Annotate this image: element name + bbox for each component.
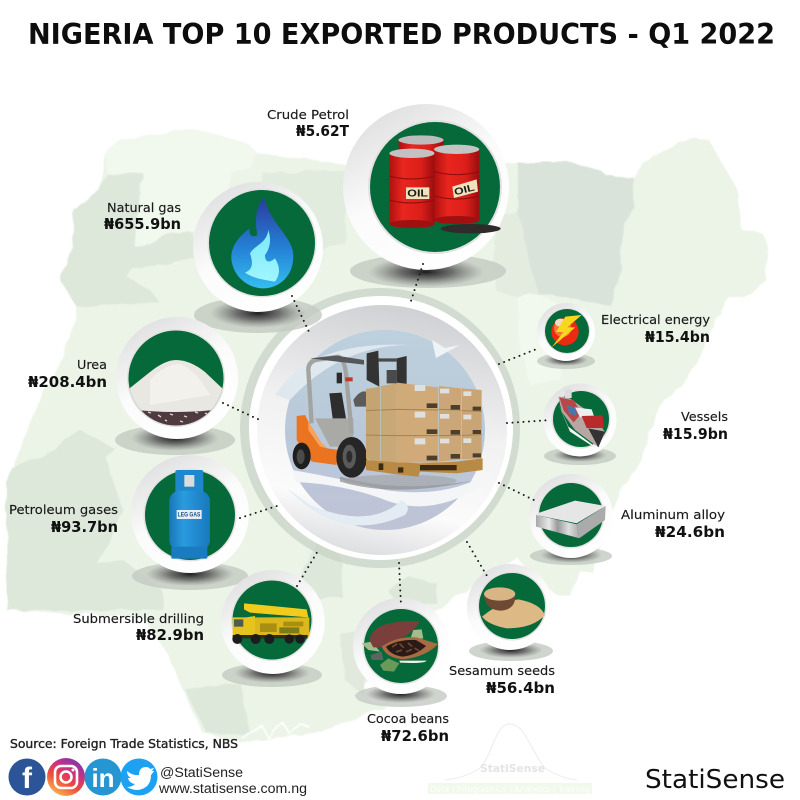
label: Aluminum alloy bbox=[621, 507, 726, 522]
label: Cocoa beans bbox=[367, 711, 449, 726]
label: ₦655.9bn bbox=[104, 215, 181, 233]
social handle and website bbox=[158, 765, 307, 796]
label: Submersible drilling bbox=[73, 611, 204, 626]
icon: linkedin: in bbox=[91, 763, 115, 793]
item: urea bbox=[28, 317, 238, 455]
label: Electrical energy bbox=[601, 312, 711, 327]
icon: aluminum sheet bbox=[536, 501, 606, 538]
icon: urea pile bbox=[130, 360, 222, 426]
icon: container ship bbox=[557, 389, 605, 449]
icon: linkedin bbox=[84, 758, 122, 796]
social icons bbox=[8, 758, 158, 796]
label: ₦208.4bn bbox=[28, 373, 107, 391]
label bbox=[28, 357, 107, 391]
label: Urea bbox=[77, 357, 107, 372]
item: petroleum gases bbox=[9, 455, 249, 590]
icon: facebook bbox=[8, 758, 46, 796]
label bbox=[267, 107, 350, 140]
icon: cocoa pods bbox=[362, 621, 438, 672]
label: ₦15.9bn bbox=[663, 425, 728, 443]
source note: Source: Foreign Trade Statistics, NBS bbox=[10, 737, 238, 751]
item: electrical energy bbox=[537, 303, 711, 369]
item: vessels bbox=[544, 384, 728, 465]
label: Natural gas bbox=[107, 200, 181, 215]
label: ₦82.9bn bbox=[136, 626, 204, 644]
icon: oil barrels: OIL bbox=[453, 183, 476, 198]
item: aluminum alloy bbox=[529, 474, 726, 565]
label bbox=[601, 312, 711, 346]
label: ₦93.7bn bbox=[51, 518, 118, 536]
item: submersible drilling bbox=[73, 570, 325, 687]
icon: instagram bbox=[47, 758, 85, 796]
label: ₦24.6bn bbox=[655, 523, 725, 541]
watermark logo bbox=[428, 724, 592, 794]
watermark logo: StatiSense bbox=[480, 762, 545, 775]
central hub: forklift bbox=[240, 288, 520, 568]
map of Nigeria bbox=[7, 128, 767, 743]
icon: flame bbox=[231, 197, 293, 288]
item: sesamum seeds bbox=[449, 564, 555, 697]
icon: lightning bbox=[551, 315, 582, 347]
title: NIGERIA TOP 10 EXPORTED PRODUCTS - Q1 2022 bbox=[28, 18, 775, 51]
globe bbox=[275, 330, 485, 530]
connector lines bbox=[223, 264, 550, 606]
icon: gas cylinder: LEG GAS bbox=[178, 513, 200, 519]
icon: twitter bbox=[120, 758, 158, 796]
item: cocoa beans bbox=[353, 598, 449, 745]
label bbox=[663, 409, 728, 443]
item: crude petrol bbox=[267, 104, 509, 288]
label bbox=[449, 663, 555, 697]
icon: oil barrels: OIL bbox=[407, 189, 428, 200]
icon: drilling truck bbox=[232, 603, 309, 644]
label: ₦56.4bn bbox=[486, 679, 555, 697]
icon: facebook: f bbox=[22, 762, 33, 795]
watermark logo: Data | Infographics | Analytics | Training bbox=[430, 785, 590, 794]
label bbox=[104, 200, 181, 233]
label: ₦5.62T bbox=[296, 122, 350, 140]
forklift illustration bbox=[293, 351, 483, 490]
social handle and website: www.statisense.com.ng bbox=[158, 781, 307, 796]
label bbox=[367, 711, 449, 745]
label: Vessels bbox=[681, 409, 728, 424]
brand logo: StatiSense bbox=[645, 765, 785, 795]
label: Crude Petrol bbox=[267, 107, 349, 122]
label bbox=[621, 507, 726, 541]
social handle and website: @StatiSense bbox=[160, 765, 243, 780]
label: Petroleum gases bbox=[9, 502, 118, 517]
label: Sesamum seeds bbox=[449, 663, 555, 678]
label: ₦15.4bn bbox=[645, 328, 710, 346]
icon: seeds and bowl bbox=[482, 587, 545, 628]
label: ₦72.6bn bbox=[381, 727, 449, 745]
item: natural gas bbox=[104, 182, 323, 333]
label bbox=[9, 502, 118, 536]
icon: oil barrels bbox=[389, 135, 501, 233]
label bbox=[73, 611, 204, 644]
icon: gas cylinder bbox=[169, 470, 210, 559]
